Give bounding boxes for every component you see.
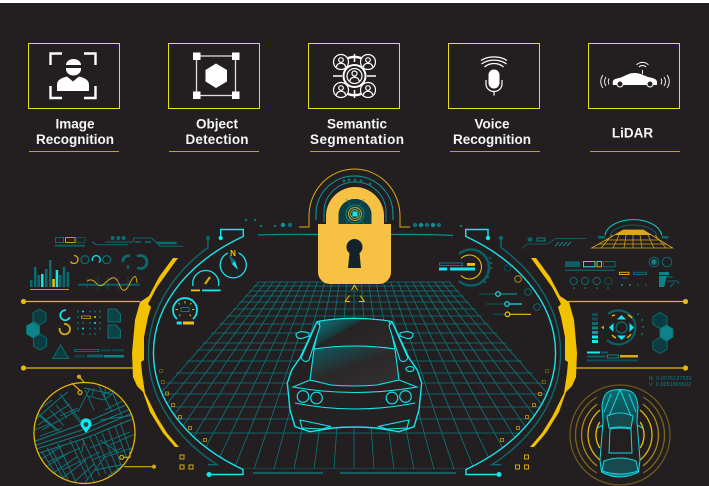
ring row [70,256,147,268]
right lower bars [587,352,638,362]
panel: voice recognition [448,44,540,152]
map callouts [72,375,156,468]
small status rings [504,265,540,310]
rear window [314,318,395,349]
top view car with radar rings [570,385,670,485]
icon box: image recognition [28,44,120,108]
progress rings [60,310,70,334]
map pin [81,418,91,433]
bar chart [30,260,69,290]
hood [310,346,399,386]
panel: lidar [588,44,680,152]
lock arcs and top readout [245,169,462,236]
shackle [326,187,384,226]
icon: person scan [50,54,96,98]
pillars [301,322,408,362]
right control circles [649,257,672,267]
heading: image recognition: Image [55,116,95,132]
right bars row [565,261,615,271]
city map [32,375,156,484]
icon box: voice recognition [448,44,540,108]
right hexagons [653,312,673,354]
hexagon cluster [26,309,46,350]
shackle inner target [338,199,372,224]
yellow dome grid [592,220,673,248]
heading: lidar: LiDAR [612,126,653,140]
icon: hexagon in bounding box [193,52,240,99]
yellow triangle marker [345,285,364,302]
heading: image recognition: Recognition [36,132,114,147]
joystick [601,310,644,344]
panel: semantic segmentation [308,44,404,152]
icon: segmented people [333,54,376,98]
icon: car with sensors [601,62,669,88]
coordinates text: V: 0.0051869502 [649,382,691,388]
coordinates text: N: 0.0076137029 [649,376,692,382]
triangle marker [53,345,69,358]
heading: voice recognition: Recognition [453,132,531,147]
heading: object detection: Detection [186,132,248,147]
teal outer ring [148,236,561,465]
small square markers [160,370,548,469]
cyan main ring [153,230,556,476]
icon box: lidar [588,44,680,108]
icon box: semantic segmentation [308,44,400,108]
left dashboard widgets [26,236,183,358]
right ring row [570,272,646,285]
speedometer gauge [191,270,221,291]
yellow connector lines [22,300,688,370]
lock body [318,224,391,284]
right dots [573,284,647,289]
heading: semantic segmentation: Segmentation [310,132,404,147]
compass gauge [220,249,246,278]
heading: object detection: Object [196,116,239,132]
rear view car [287,318,422,432]
trunk lines and lights [293,366,417,429]
sliders [479,292,531,317]
top view car [598,390,642,477]
padlock [318,187,391,284]
heading: semantic segmentation: Semantic [327,116,388,132]
panel: object detection [168,44,260,152]
waveform [78,276,140,290]
keyhole [346,239,362,268]
status bars [74,349,124,358]
right dashboard widgets [522,220,692,388]
panel: image recognition [28,44,120,152]
yellow blade right [530,258,577,447]
car body [287,318,422,432]
indicator rects and circuit [55,236,183,246]
coordinates text [649,376,692,388]
document icons [108,309,120,338]
icon: microphone with waves [481,57,507,96]
dot matrix [77,310,101,335]
heading: voice recognition: Voice [474,116,510,132]
round dial gauge [173,298,197,324]
yellow blade left [132,258,179,447]
right circuit [522,238,586,249]
radar arcs [575,397,665,473]
level meter [592,313,598,343]
right inner ring gauge [439,250,492,286]
mirrors [296,332,413,339]
icon box: object detection [168,44,260,108]
right file icon [659,272,679,287]
compass gauge: N [230,249,236,258]
perspective grid floor [162,282,547,469]
